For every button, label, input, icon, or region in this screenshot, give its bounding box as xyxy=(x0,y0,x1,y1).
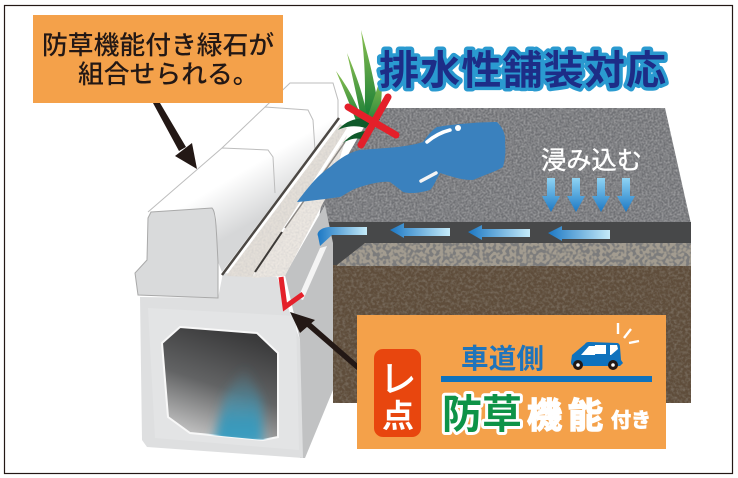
arrow: to curb xyxy=(153,103,197,169)
curb front face xyxy=(135,208,218,298)
curb body xyxy=(148,83,338,272)
callout: product badge xyxy=(357,315,666,449)
gravel layer xyxy=(337,243,691,266)
arrows: soaking down xyxy=(542,178,635,212)
red badge xyxy=(374,349,421,437)
icon: grass xyxy=(336,30,382,143)
anti-weed text: 機 xyxy=(527,397,562,436)
soil layer xyxy=(333,264,691,403)
block hole xyxy=(162,327,278,440)
grate strips xyxy=(226,124,347,277)
red badge: 点 xyxy=(382,398,414,434)
icon: red cross xyxy=(348,97,396,145)
callout: top label xyxy=(33,15,283,103)
water puddle xyxy=(297,122,505,202)
red badge: レ xyxy=(380,359,416,400)
curb segment seams xyxy=(148,83,338,212)
block right side xyxy=(285,205,333,458)
pavement top surface xyxy=(318,108,691,224)
callout text: 組合せられる。 xyxy=(78,60,259,89)
water in hole xyxy=(213,365,263,445)
callout text: 防草機能付き緑石が xyxy=(42,31,274,60)
white slit xyxy=(298,246,327,300)
pavement cross-section xyxy=(318,108,691,403)
anti-weed text: 防草 xyxy=(442,393,522,437)
anti-weed text: 付き xyxy=(611,409,651,432)
label: soak in: 浸み込む xyxy=(541,147,642,175)
blue divider xyxy=(441,376,652,382)
arrows: lateral flow xyxy=(318,223,610,246)
anti-weed text: 能 xyxy=(568,397,603,436)
roadway side label: 車道側 xyxy=(461,343,544,374)
block body front xyxy=(140,273,303,458)
icon: car xyxy=(571,323,639,370)
arrow: to mark xyxy=(290,312,358,371)
water highlights xyxy=(421,125,461,181)
dark permeable layer xyxy=(318,222,691,244)
red check mark xyxy=(281,277,303,307)
concrete curb block xyxy=(135,83,347,458)
anti-weed text xyxy=(442,393,651,437)
title: 排水性舗装対応 xyxy=(379,49,666,93)
